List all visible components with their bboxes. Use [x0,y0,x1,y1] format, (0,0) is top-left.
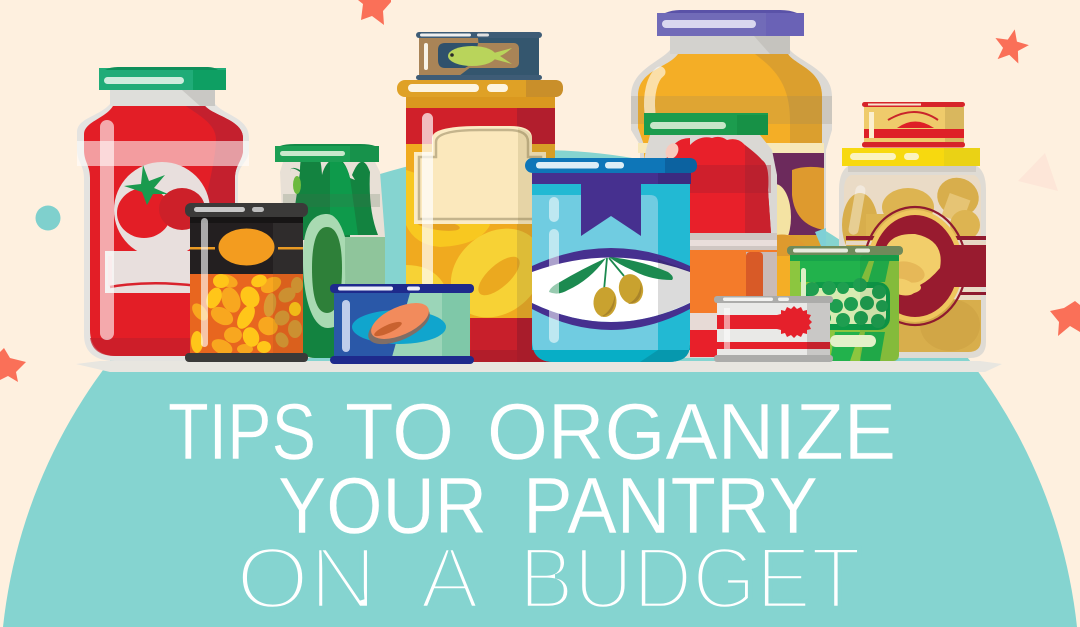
salmon steak [363,296,435,352]
title line 1: TIPS [168,387,316,476]
title line 1 [168,387,896,476]
can on jar lid [862,102,965,148]
mushroom label [864,207,986,325]
title line 2: PANTRY [523,461,818,550]
jar: large orange preserve [631,10,832,300]
title line 2: YOUR [278,461,487,550]
can: fish [416,32,542,80]
seal [776,306,812,338]
title line 1: ORGANIZE [487,387,896,476]
shelf [76,361,1002,372]
label circle and tomatoes [105,162,210,293]
can: beans [185,203,308,362]
title line 2 [278,461,818,550]
jar: tomato sauce [77,67,249,361]
jar: red peppers [641,113,777,358]
can: peas [787,246,903,361]
teal dome background [3,150,1077,627]
can: small red striped [714,296,833,362]
title line 3: ON [236,530,377,627]
title line 1: TO [345,387,454,476]
title line 3 [236,530,861,627]
jar: mushrooms [839,102,986,358]
can: pineapple rings [397,80,563,362]
jar: pickles [275,144,385,358]
olive label [532,248,690,330]
icon: fish [448,46,512,66]
title line 3: A [420,530,479,627]
can: tuna [330,284,474,364]
title [168,387,896,627]
decorative stars and shapes [0,0,1080,382]
can: olives [525,158,697,362]
ribbon [581,183,641,236]
title line 3: BUDGET [519,530,861,627]
